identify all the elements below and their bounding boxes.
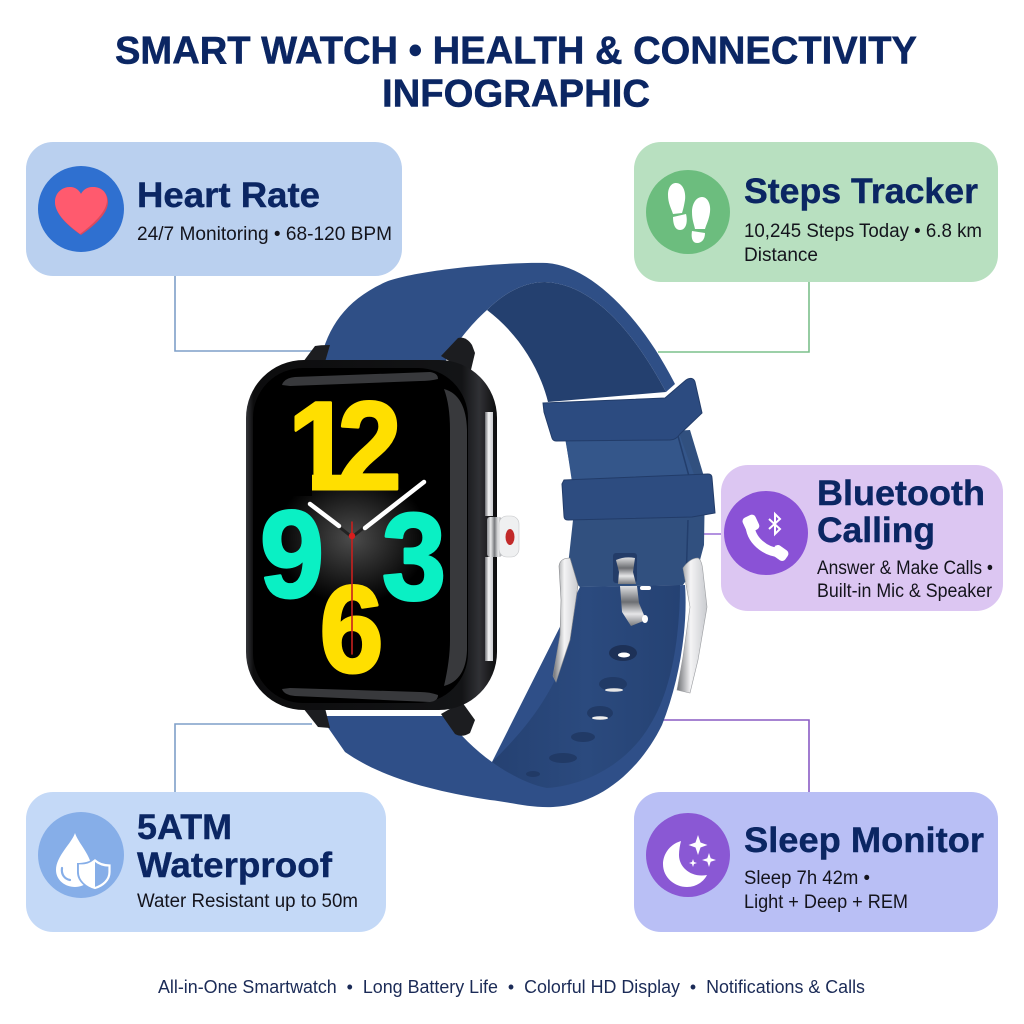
icon: footprints (646, 170, 730, 254)
description: Answer & Make Calls • (817, 558, 993, 579)
heading: Steps Tracker (744, 172, 978, 211)
watch screen (253, 368, 468, 703)
heading: Bluetooth (817, 474, 985, 513)
icon: moon and stars (646, 813, 730, 897)
upper strap back (487, 282, 666, 402)
description: 10,245 Steps Today • 6.8 km (744, 221, 982, 242)
panel: heart rate (26, 142, 402, 276)
heading (137, 808, 332, 885)
numeral 9: 9 (260, 487, 324, 624)
description: Built-in Mic & Speaker (817, 581, 993, 602)
crown (487, 516, 519, 557)
footer tagline: All-in-One Smartwatch • Long Battery Life • Colorful HD Display • Notifications & Calls (158, 977, 865, 997)
strap middle section (565, 430, 705, 587)
panel: steps tracker (634, 142, 998, 282)
lower strap inner (492, 585, 680, 788)
side metal strip (485, 412, 493, 661)
description: Light + Deep + REM (744, 892, 908, 913)
description (744, 868, 908, 913)
screen glare (282, 372, 467, 702)
lower strap outer rim (320, 585, 686, 807)
numeral 12: 2 (338, 377, 402, 516)
description: Water Resistant up to 50m (137, 891, 358, 912)
heading: Waterproof (137, 846, 332, 885)
panel: bluetooth calling (721, 465, 1003, 611)
icon: bluetooth phone (724, 491, 808, 575)
lugs (303, 338, 475, 736)
heading: Sleep Monitor (744, 821, 984, 860)
connector: bluetooth calling (702, 533, 722, 535)
mask on foot of numeral 1 (284, 472, 312, 496)
buckle frame right (677, 558, 707, 693)
strap loop one (543, 378, 702, 441)
description: Distance (744, 245, 818, 266)
numeral 3: 3 (382, 489, 446, 626)
face glow (276, 472, 428, 604)
connector: waterproof (175, 724, 312, 792)
heading (817, 474, 985, 550)
heading: Calling (817, 511, 935, 550)
description: Sleep 7h 42m • (744, 868, 870, 889)
watch case (246, 360, 497, 710)
numeral 6: 6 (320, 562, 384, 699)
description: 24/7 Monitoring • 68-120 BPM (137, 224, 392, 245)
title: INFOGRAPHIC (382, 72, 650, 116)
description (744, 221, 982, 266)
smartwatch illustration (246, 263, 715, 807)
panel: waterproof (26, 792, 386, 932)
buckle pin (613, 553, 651, 626)
title: SMART WATCH • HEALTH & CONNECTIVITY (115, 30, 917, 72)
heading: 5ATM (137, 808, 232, 847)
strap holes (526, 645, 637, 777)
connector: steps tracker (658, 282, 809, 352)
panel: sleep monitor (634, 792, 998, 932)
strap loop two (562, 474, 715, 520)
numeral 12: 1 (288, 377, 352, 516)
connector: sleep monitor (662, 720, 809, 792)
title (115, 30, 917, 116)
icon: water drop and shield (38, 812, 124, 898)
description (817, 558, 993, 602)
connector: heart rate (175, 276, 312, 351)
watch hands (310, 482, 424, 654)
buckle frame left (553, 558, 578, 682)
upper strap front (320, 263, 675, 392)
heading: Heart Rate (137, 176, 320, 215)
icon: heart (38, 166, 124, 252)
